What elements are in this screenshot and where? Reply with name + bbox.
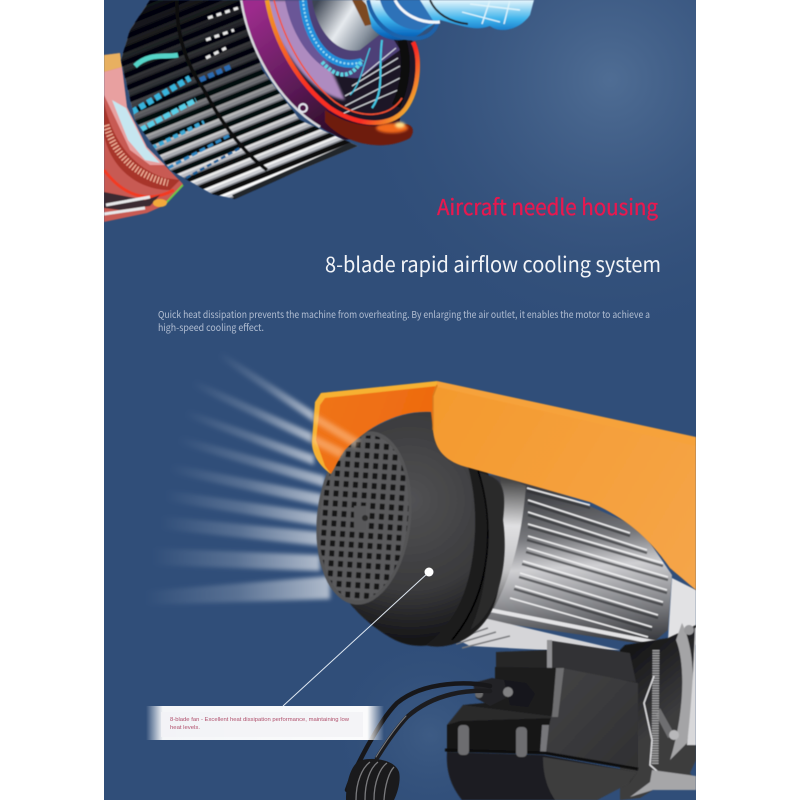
subtitle: aircraft needle housing: Aircraft needle housing (437, 190, 659, 222)
small motor at left with red ring (104, 53, 183, 222)
heading: 8-blade rapid airflow cooling system (325, 249, 661, 279)
description text (158, 310, 650, 334)
light streaks over hood (312, 413, 360, 458)
callout label: 8-blade fan: 8-blade fan - Excellent heat dissipation performance, maintaining low (170, 717, 349, 723)
infographic canvas (104, 0, 696, 800)
power cables and coil (346, 684, 490, 800)
panel background (104, 0, 696, 800)
right side frame and spring (620, 623, 696, 800)
callout label: 8-blade fan (146, 706, 384, 740)
callout label: 8-blade fan: heat levels. (170, 725, 200, 731)
motor body with silver cooling fins (450, 474, 696, 650)
cyan data glow on blades (132, 8, 240, 178)
description text: Quick heat dissipation prevents the machine from overheating. By enlarging the air outlet, it enables the motor to achieve a (158, 307, 650, 321)
fins (510, 488, 668, 637)
airflow streaks (164, 360, 333, 604)
blue shaft tube at top right of fan (365, 0, 534, 40)
orange motor hood (312, 381, 696, 590)
fan front face with glowing ring (241, 0, 418, 145)
callout leader line with dot (283, 568, 434, 706)
black control box (445, 640, 638, 800)
fan cap with grille (308, 412, 505, 647)
grille (316, 431, 410, 606)
cable glands (473, 678, 514, 706)
mounting posts (458, 725, 469, 755)
description text: high-speed cooling effect. (158, 320, 264, 334)
blower fan housing with blades (120, 0, 358, 200)
